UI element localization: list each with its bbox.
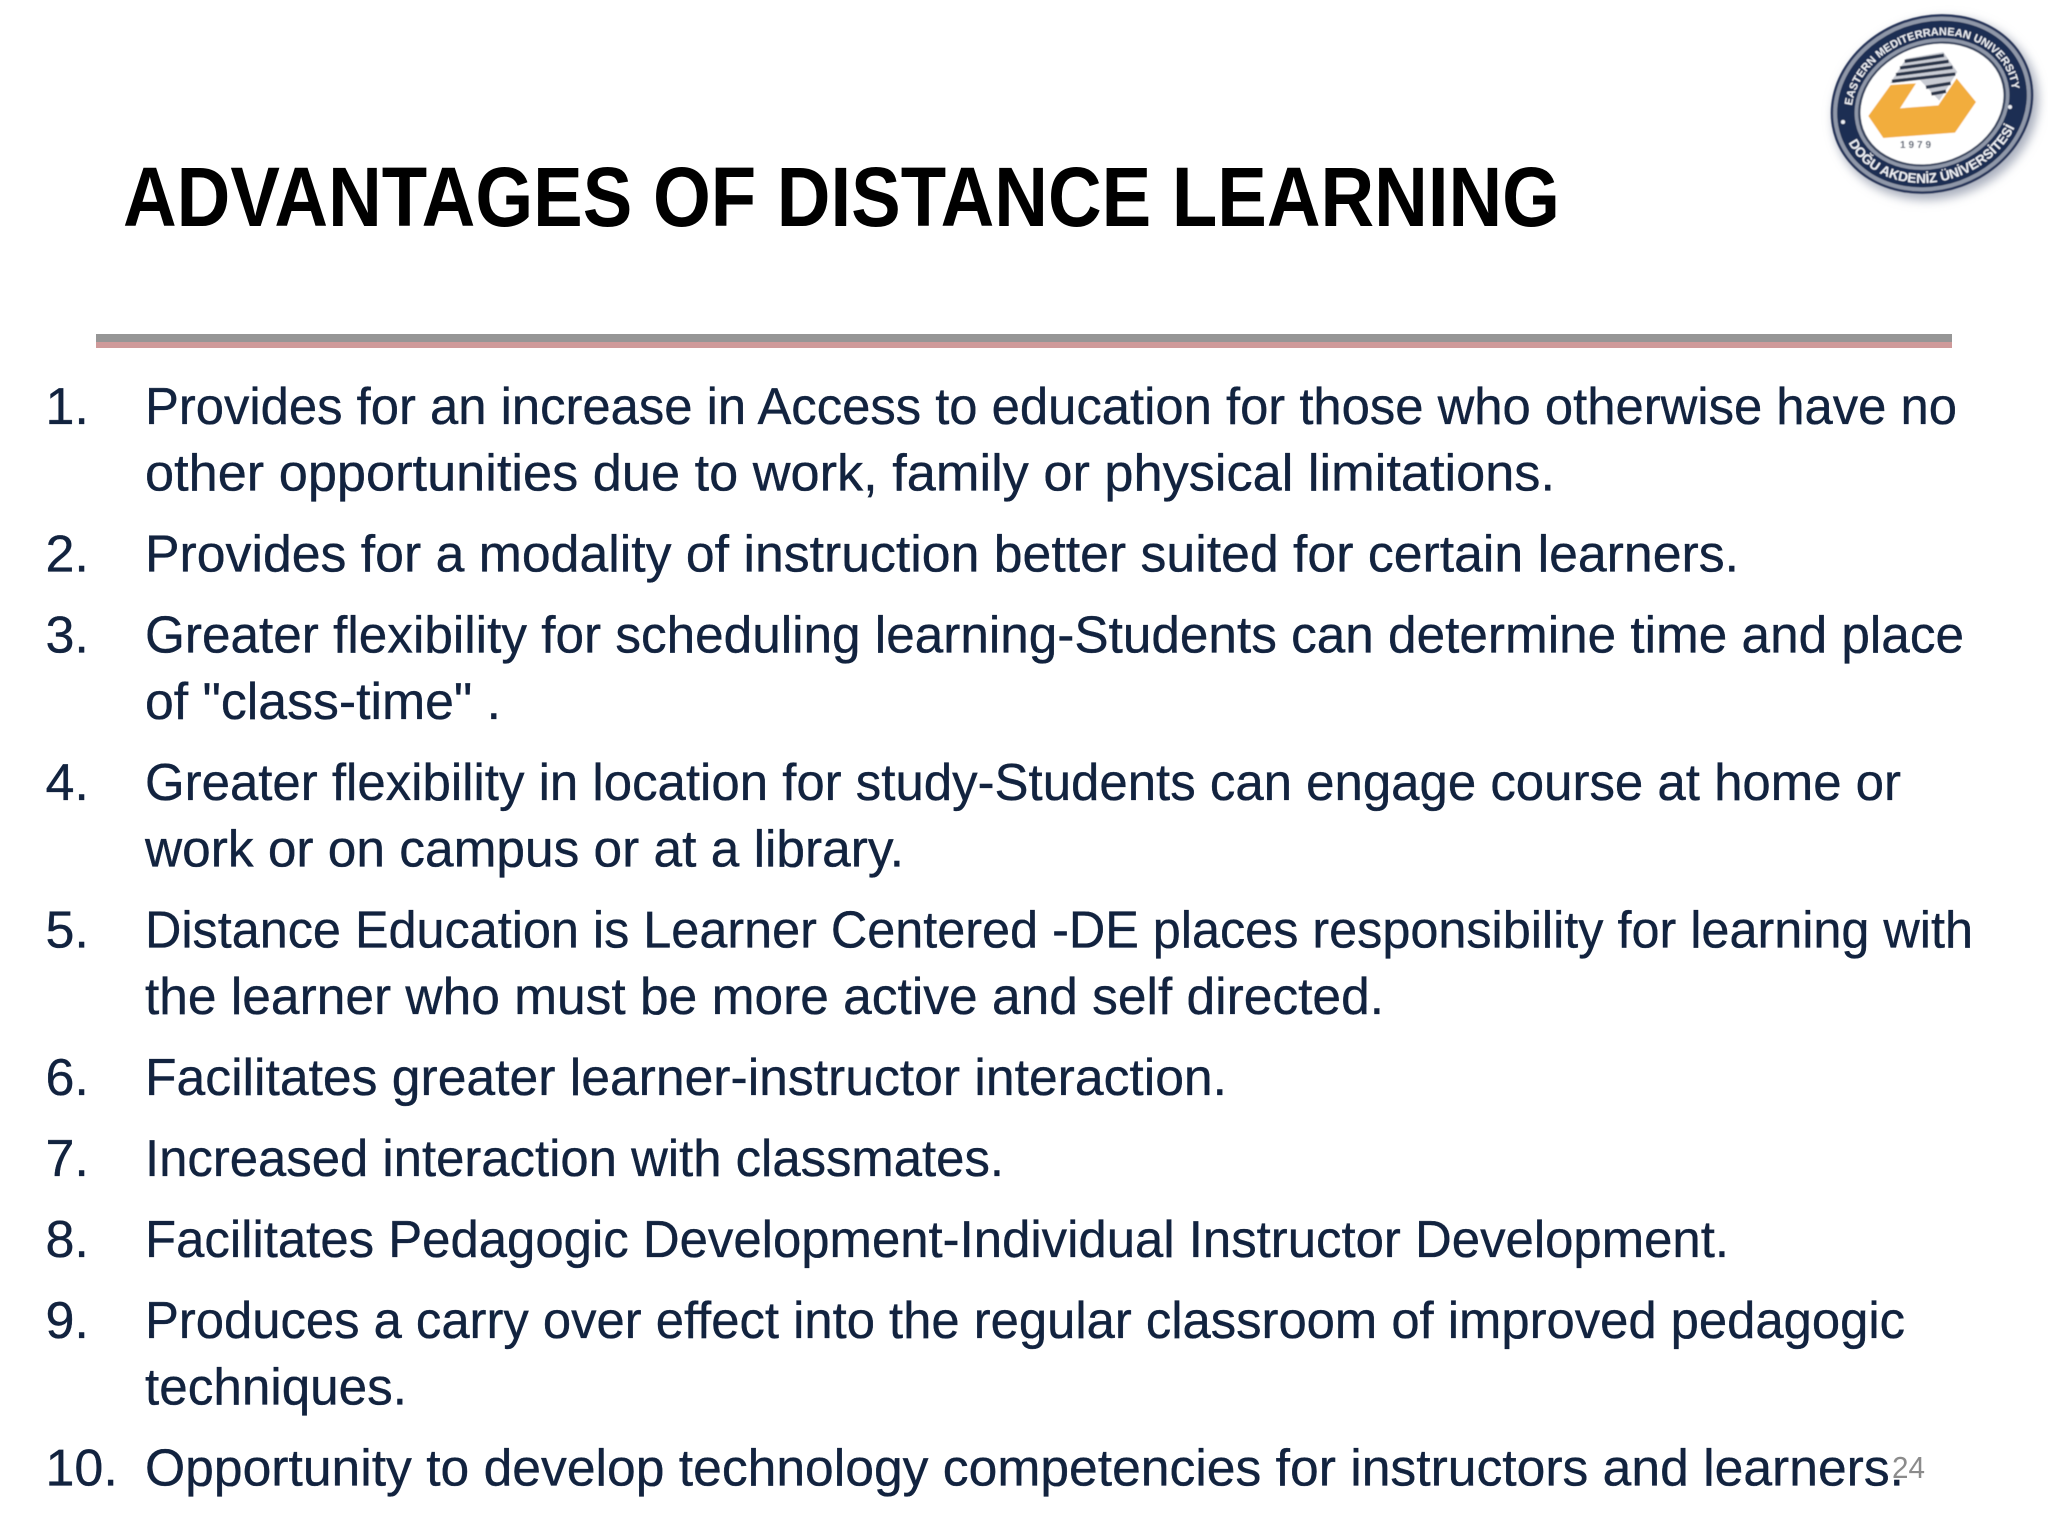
- item 4: 4.: [46, 754, 89, 812]
- item 1: Provides for an increase in Access to education for those who otherwise have no: [145, 378, 1957, 436]
- item 2: Provides for a modality of instruction better suited for certain learners.: [145, 526, 1739, 584]
- item 7: Increased interaction with classmates.: [145, 1130, 1004, 1188]
- item 7: 7.: [46, 1130, 89, 1188]
- item 6: Facilitates greater learner-instructor interaction.: [145, 1049, 1227, 1107]
- item 3: Greater flexibility for scheduling learning-Students can determine time and place: [145, 606, 1964, 664]
- item 9: techniques.: [145, 1358, 407, 1416]
- logo: Eastern Mediterranean University seal: EASTERN MEDITERRANEAN UNIVERSITY: [1844, 26, 2020, 106]
- item 4: Greater flexibility in location for study-Students can engage course at home or: [145, 754, 1901, 812]
- item 5: Distance Education is Learner Centered -DE places responsibility for learning with: [145, 902, 1973, 960]
- numbered list of advantages: [46, 378, 1973, 1498]
- item 3: [46, 606, 1964, 731]
- item 2: 2.: [46, 526, 89, 584]
- item 1: [46, 378, 1957, 502]
- item 9: [46, 1292, 1905, 1416]
- logo: Eastern Mediterranean University seal: 1979: [1900, 140, 1931, 151]
- title rule: [96, 334, 1952, 348]
- title: ADVANTAGES OF DISTANCE LEARNING: [123, 150, 1560, 244]
- item 5: [46, 902, 1973, 1026]
- item 6: 6.: [46, 1049, 89, 1107]
- item 10: Opportunity to develop technology competencies for instructors and learners.: [145, 1440, 1904, 1498]
- logo: Eastern Mediterranean University seal: DOĞU AKDENİZ ÜNİVERSİTESİ: [1848, 122, 2015, 184]
- item 5: 5.: [46, 902, 89, 960]
- item 1: other opportunities due to work, family or physical limitations.: [145, 444, 1555, 502]
- item 5: the learner who must be more active and self directed.: [145, 968, 1384, 1026]
- item 1: 1.: [46, 378, 89, 436]
- item 4: work or on campus or at a library.: [144, 820, 904, 878]
- logo: Eastern Mediterranean University seal: [1828, 12, 2044, 206]
- item 10: 10.: [46, 1440, 118, 1498]
- item 3: of "class-time" .: [145, 673, 501, 731]
- item 4: [46, 754, 1901, 878]
- item 8: 8.: [46, 1211, 89, 1269]
- item 8: Facilitates Pedagogic Development-Individual Instructor Development.: [145, 1211, 1729, 1269]
- page number: 24: [1892, 1450, 1925, 1485]
- item 9: Produces a carry over effect into the regular classroom of improved pedagogic: [145, 1292, 1905, 1350]
- item 9: 9.: [46, 1292, 89, 1350]
- item 3: 3.: [46, 606, 89, 664]
